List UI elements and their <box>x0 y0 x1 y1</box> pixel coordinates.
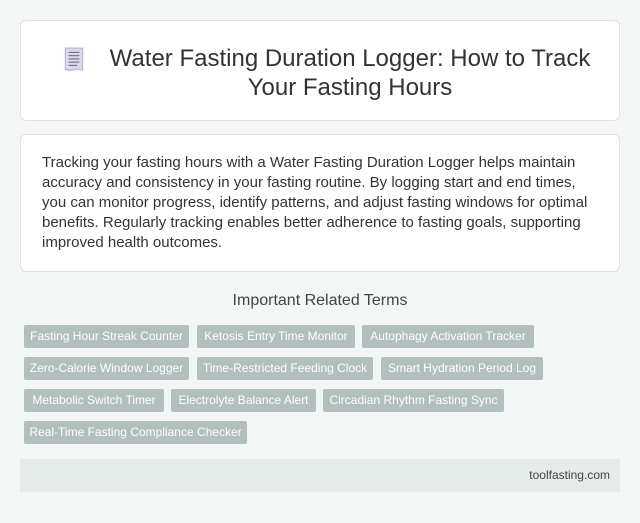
tag <box>197 325 355 348</box>
icon: document <box>64 48 84 72</box>
tag: Real-Time Fasting Compliance Checker <box>29 425 242 439</box>
tag <box>24 389 164 412</box>
title card <box>20 20 620 121</box>
tag <box>362 325 534 348</box>
tag <box>381 357 543 380</box>
tag: Circadian Rhythm Fasting Sync <box>329 393 498 407</box>
footer source text: toolfasting.com <box>529 468 610 482</box>
tag: Autophagy Activation Tracker <box>370 329 526 343</box>
tag: Smart Hydration Period Log <box>388 361 536 375</box>
tag: Metabolic Switch Timer <box>32 393 156 407</box>
tag: Fasting Hour Streak Counter <box>30 329 183 343</box>
tag <box>24 357 189 380</box>
tag <box>197 357 373 380</box>
description text: Tracking your fasting hours with a Water Fasting Duration Logger helps maintain accuracy and consistency in your fasting routine. By logging start and end times, you can monitor progress, identify patterns, and adjust fasting windows for optimal benefits. Regularly tracking enables better adherence to fasting goals, supporting improved health outcomes. <box>42 154 587 251</box>
tag: Time-Restricted Feeding Clock <box>203 361 367 375</box>
tag <box>24 325 189 348</box>
related terms heading: Important Related Terms <box>233 292 407 309</box>
footer <box>20 459 620 492</box>
description card <box>20 134 620 272</box>
tag <box>24 421 247 444</box>
tag: Zero-Calorie Window Logger <box>30 361 183 375</box>
title: Water Fasting Duration Logger: How to Track Your Fasting Hours <box>110 45 590 101</box>
tag: Ketosis Entry Time Monitor <box>204 329 348 343</box>
tag: Electrolyte Balance Alert <box>178 393 309 407</box>
tag <box>323 389 504 412</box>
tag <box>171 389 316 412</box>
